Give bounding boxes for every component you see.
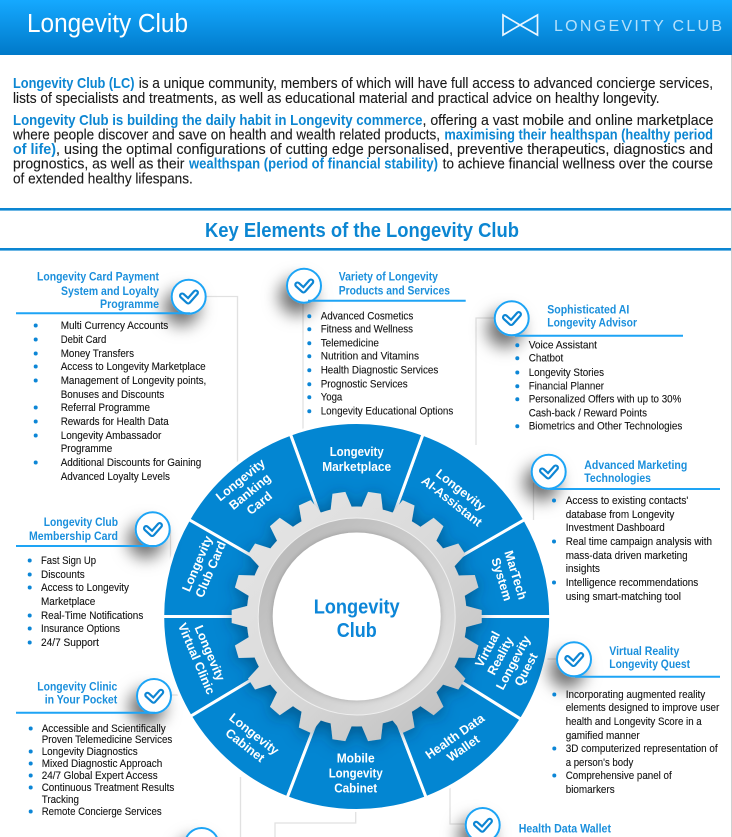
bullet list: Personalized Offers with up to 30%	[529, 394, 681, 406]
segment: Mobile Longevity Cabinet: Longevity	[329, 767, 383, 781]
panel heading: Technologies	[584, 471, 651, 485]
bullet list: Access to Longevity Marketplace	[61, 361, 206, 373]
bullet list: Mixed Diagnostic Approach	[42, 758, 162, 770]
bullet list: Real-Time Notifications	[41, 610, 144, 622]
panel: Virtual Reality Longevity Quest	[552, 642, 720, 796]
icon: check	[136, 512, 170, 546]
panel heading: Longevity Card Payment	[37, 270, 159, 284]
icon: check	[466, 808, 500, 837]
bullet list: Nutrition and Vitamins	[321, 351, 419, 363]
bullet list: Access to existing contacts'	[566, 495, 688, 507]
segment: Longevity Marketplace: Longevity	[330, 445, 384, 459]
bullet list: Prognostic Services	[321, 379, 408, 391]
bullet list	[552, 689, 720, 796]
intro text block: of extended healthy lifespans.	[13, 170, 193, 188]
panel heading: Longevity Quest	[609, 657, 690, 671]
bullet list: Accessible and Scientifically	[42, 723, 166, 735]
bullet list: biomarkers	[566, 784, 615, 796]
panel heading	[339, 270, 450, 298]
segment: Longevity Cabinet: Longevity	[226, 710, 282, 758]
bullet list: Multi Currency Accounts	[61, 320, 169, 332]
panel heading: Membership Card	[29, 529, 118, 543]
segment: Longevity Banking Card: Longevity	[213, 456, 268, 504]
segment: Longevity Cabinet	[217, 710, 282, 769]
panel heading: System and Loyalty	[61, 284, 159, 298]
gear	[225, 485, 489, 749]
icon: check	[172, 280, 206, 314]
intro text block: Longevity Club is building the daily habit in Longevity commerce	[13, 112, 422, 129]
bullet list: elements designed to improve user	[566, 702, 720, 714]
segment: Longevity AI-Assistant: Longevity	[433, 466, 488, 514]
panel: Variety of Longevity Products	[287, 269, 466, 418]
panel heading: Programme	[100, 297, 159, 311]
bullet list: Longevity Stories	[529, 367, 604, 379]
bullet list	[515, 340, 683, 433]
wheel outer segments	[163, 423, 551, 810]
panel heading: Virtual Reality	[609, 644, 680, 658]
icon: check, bottom left cut off	[185, 828, 219, 837]
hub label: Longevity	[314, 596, 400, 618]
bullet list: Health Diagnostic Services	[321, 365, 439, 377]
bullet list: insights	[566, 563, 600, 575]
panel: Sophisticated AI Longevity Advisor	[495, 301, 683, 433]
bullet list: 24/7 Support	[41, 637, 99, 649]
bullet list	[28, 555, 144, 649]
logo wordmark: LONGEVITY CLUB	[554, 18, 722, 35]
bullet list: Fitness and Wellness	[321, 324, 413, 336]
segment: Longevity Club Card: Club Card	[193, 539, 229, 600]
bullet list: Advanced Loyalty Levels	[61, 471, 170, 483]
segment: Longevity Virtual Clinic: Longevity	[192, 623, 228, 683]
panel heading: Advanced Marketing	[584, 458, 687, 472]
panel heading	[609, 644, 690, 671]
panel heading	[584, 458, 687, 485]
page right edge	[731, 55, 732, 837]
icon: check	[495, 301, 529, 335]
segment: Virtual Reality Longevity Quest	[468, 620, 546, 699]
bullet list: Financial Planner	[529, 381, 604, 393]
bullet list: mass-data driven marketing	[566, 550, 688, 562]
bullet list: Marketplace	[41, 596, 95, 608]
panel heading: in Your Pocket	[45, 693, 117, 707]
bullet list: Debit Card	[61, 334, 106, 346]
bullet list: Chatbot	[529, 353, 563, 365]
panel heading: Health Data Wallet	[519, 822, 611, 836]
icon: check	[287, 269, 321, 303]
segment: Longevity Banking Card: Banking	[226, 471, 274, 513]
bullet list	[34, 320, 206, 483]
segment: Mobile Longevity Cabinet	[329, 752, 383, 796]
panel: Advanced Marketing Technologies	[532, 455, 720, 603]
bullet list: 3D computerized representation of	[566, 743, 719, 755]
segment: Longevity Club Card: Longevity	[179, 534, 215, 594]
panel heading: Longevity Club	[44, 515, 118, 529]
panel heading: Variety of Longevity	[339, 270, 438, 284]
panel: Health Data Wallet	[466, 808, 611, 837]
segment: Longevity Banking Card	[213, 456, 287, 527]
bullet list: database from Longevity	[566, 509, 675, 521]
bullet list: 24/7 Global Expert Access	[42, 770, 158, 782]
bullet list: Telemedicine	[321, 338, 379, 350]
intro text block: Longevity Club (LC)	[13, 75, 134, 92]
segment: Longevity Cabinet: Cabinet	[223, 726, 268, 766]
intro text block: where people discover and save on health and wealth related products,	[12, 126, 440, 144]
header title: Longevity Club	[27, 10, 188, 38]
bullet list: Advanced Cosmetics	[321, 311, 414, 323]
icon: check	[137, 679, 171, 713]
segment: Health Data Wallet: Wallet	[444, 732, 483, 765]
bullet list: Proven Telemedicine Services	[42, 734, 173, 746]
bullet list: Longevity Educational Options	[321, 406, 454, 418]
bullet list: Investment Dashboard	[566, 522, 665, 534]
bullet list: Management of Longevity points,	[61, 375, 206, 387]
bullet list	[29, 723, 175, 818]
intro text block: prognostics, as well as their	[13, 156, 184, 172]
intro text block	[12, 75, 713, 188]
bullet list: Programme	[61, 443, 112, 455]
bullet list: Cash-back / Reward Points	[529, 408, 647, 420]
panel heading: Products and Services	[339, 284, 450, 298]
bullet list: Bonuses and Discounts	[61, 389, 165, 401]
segment: Virtual Reality Longevity Quest: Virtual	[472, 629, 503, 670]
intro text block: to achieve financial wellness over the course	[443, 156, 713, 172]
bullet list: Real time campaign analysis with	[566, 536, 712, 548]
panel: Longevity Card Payment	[16, 270, 206, 483]
panel heading: Longevity Advisor	[547, 316, 637, 330]
panel heading	[37, 270, 159, 311]
panel heading: Sophisticated AI	[547, 303, 629, 317]
segment: Virtual Reality Longevity Quest: Quest	[512, 650, 541, 689]
bullet list: Longevity Ambassador	[61, 430, 162, 442]
bullet list: Tracking	[42, 794, 79, 806]
segment: MarTech System	[488, 549, 530, 606]
bullet list: Discounts	[41, 569, 85, 581]
bullet list: a person's body	[566, 757, 634, 769]
logo icon	[503, 15, 538, 35]
bullet list: Yoga	[321, 392, 343, 404]
bullet list: Biometrics and Other Technologies	[529, 421, 683, 433]
bullet list: Comprehensive panel of	[566, 770, 673, 782]
gear inner ring	[258, 518, 455, 715]
panel heading	[37, 680, 118, 707]
panel: Longevity Clinic in Your Pocket	[16, 679, 175, 818]
bullet list: Voice Assistant	[529, 340, 597, 352]
segment: Longevity AI-Assistant: AI-Assistant	[419, 474, 485, 530]
intro text block: , using the optimal configurations of cutting edge personalised, preventive therapeutics, diagnostics and	[56, 141, 713, 158]
segment: Longevity Virtual Clinic: Virtual Clinic	[175, 621, 218, 697]
bullet list: Continuous Treatment Results	[42, 782, 175, 794]
wheel diagram	[163, 423, 551, 810]
bullet list: Incorporating augmented reality	[566, 689, 706, 701]
panel heading: Longevity Clinic	[37, 680, 118, 694]
bullet list: Rewards for Health Data	[61, 416, 169, 428]
bullet list: Insurance Options	[41, 623, 120, 635]
segment: MarTech System: System	[488, 556, 515, 603]
intro text block: , offering a vast mobile and online marketplace	[422, 112, 714, 129]
segment: Longevity Marketplace	[322, 445, 391, 474]
segment: Longevity Marketplace: Marketplace	[322, 460, 391, 474]
bullet list: Remote Concierge Services	[42, 806, 162, 818]
icon: check	[532, 455, 566, 489]
panel: Longevity Club Membership Card	[16, 512, 170, 649]
segment: Health Data Wallet: Health Data	[423, 711, 488, 762]
connector lines	[170, 296, 557, 837]
bullet list: Longevity Diagnostics	[42, 746, 138, 758]
bullet list	[307, 311, 454, 418]
intro text block: lists of specialists and treatments, as well as educational material and practical advice on healthy longevity.	[13, 90, 660, 107]
section heading: Key Elements of the Longevity Club	[205, 219, 519, 242]
header bar	[0, 0, 732, 55]
segment: MarTech System: MarTech	[501, 549, 530, 601]
bullet list: health and Longevity Score in a	[566, 716, 702, 728]
hub label	[314, 596, 400, 642]
icon: check	[557, 642, 591, 676]
bullet list: gamified manner	[566, 730, 640, 742]
bullet list: Additional Discounts for Gaining	[61, 457, 201, 469]
intro text block: wealthspan (period of financial stability)	[188, 156, 438, 172]
segment: Longevity Club Card	[179, 534, 229, 600]
bullet list: Referral Programme	[61, 402, 150, 414]
panel heading	[547, 303, 637, 330]
bullet list	[552, 495, 712, 603]
intro text block: of life)	[13, 141, 56, 158]
segment: Longevity Banking Card: Card	[244, 489, 275, 518]
bullet list: Access to Longevity	[41, 582, 129, 594]
panel heading	[29, 515, 118, 543]
segment: Mobile Longevity Cabinet: Cabinet	[334, 782, 378, 796]
segment: Mobile Longevity Cabinet: Mobile	[337, 752, 375, 766]
bullet list: Intelligence recommendations	[566, 577, 699, 589]
bullet list: Money Transfers	[61, 348, 134, 360]
segment: Virtual Reality Longevity Quest: Longevity	[493, 633, 533, 692]
bullet list: using smart-matching tool	[566, 591, 681, 603]
bullet list: Fast Sign Up	[41, 555, 96, 567]
segment: Virtual Reality Longevity Quest: Reality	[485, 635, 516, 677]
hub label: Club	[337, 620, 377, 642]
